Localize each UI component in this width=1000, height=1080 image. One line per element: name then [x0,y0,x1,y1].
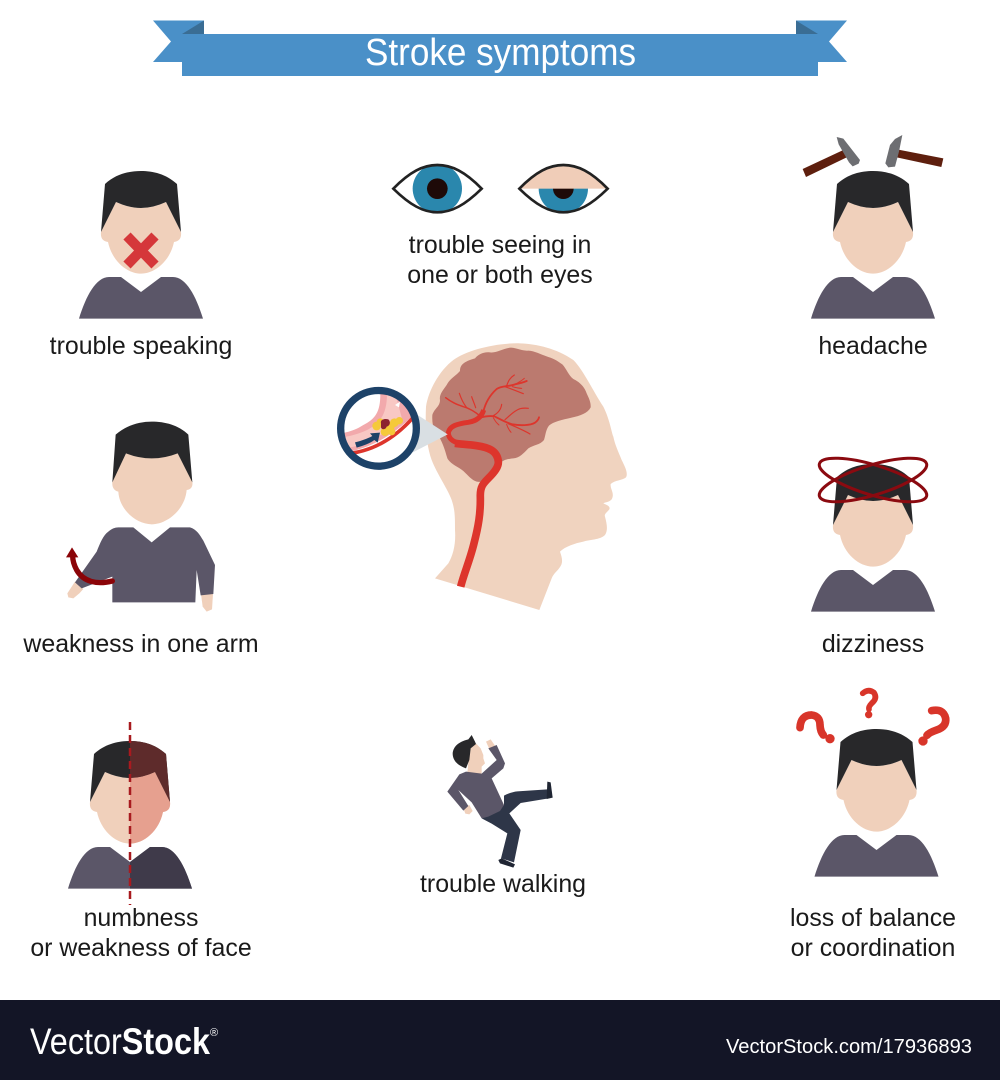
symptom: numbness of face [30,722,252,962]
magnifier cone [412,415,448,453]
label: headache: headache [818,332,928,360]
symptom: trouble walking [420,735,586,898]
symptom: dizziness [811,449,935,658]
head profile [426,343,627,610]
label: trouble speaking: trouble speaking [50,332,232,360]
person: balance [814,729,938,877]
plaque [372,417,403,436]
person: headache [811,171,935,319]
arrow: arm movement [66,547,112,583]
clot [381,419,390,429]
symptom: numbness of face: or weakness of face [30,934,252,962]
footer id: VectorStock.com/17936893 [726,1036,972,1058]
label: dizziness: dizziness [822,630,924,658]
person: dizziness [811,464,935,612]
person: arm [67,422,215,612]
symptom: trouble seeing [393,162,610,289]
symptom: headache [803,135,943,360]
label: trouble seeing: trouble seeing in [409,231,591,259]
footer bar: ® [210,1027,218,1039]
symptom: trouble speaking [50,171,232,360]
title: Stroke symptoms [365,32,636,74]
symptom: loss of balance [790,691,956,962]
dashed midline [129,722,131,905]
icon: question marks [800,691,946,746]
brain [432,348,591,482]
footer logo: VectorStock [30,1021,210,1062]
footer bar [0,1000,1000,1080]
person: half numb [68,741,192,889]
label: balance: loss of balance [790,904,956,932]
artery neck segment [455,443,498,587]
person: speaking [79,171,203,319]
icon: spinning rings [815,449,931,511]
magnifier ring [341,390,416,466]
central head with brain [426,343,627,610]
artery branches [446,375,539,434]
blood flow arrow [355,433,380,448]
symptom: trouble seeing: one or both eyes [407,261,593,289]
title banner [153,20,847,76]
icon: red cross over mouth [127,236,155,265]
icon: hammers [803,135,943,177]
symptom: weakness in one arm [22,422,259,658]
icon: eyes [393,162,610,213]
magnifier: blocked artery [341,387,448,466]
vessel wall [344,394,411,451]
symptom: loss of balance: or coordination [791,934,955,962]
figure: falling man [447,735,553,868]
label: numbness: numbness [84,904,198,932]
label: trouble walking: trouble walking [420,870,586,898]
artery upper loop [448,410,484,445]
label: weakness in one arm: weakness in one arm [22,630,259,658]
